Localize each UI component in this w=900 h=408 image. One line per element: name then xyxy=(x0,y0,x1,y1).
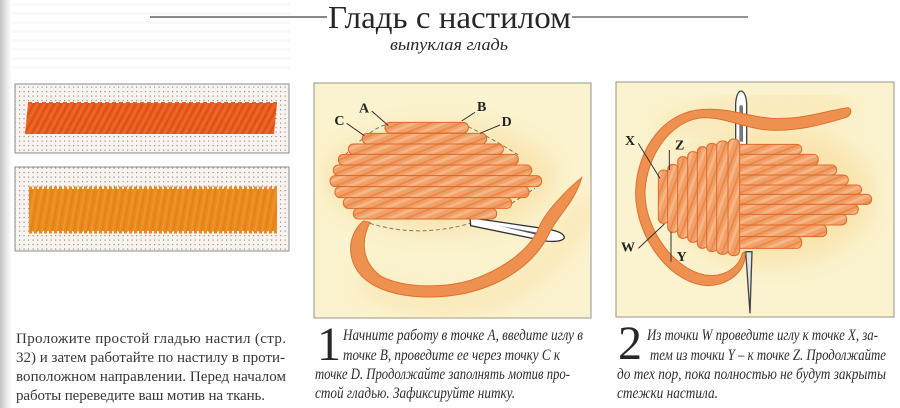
point labels: Z xyxy=(675,139,684,154)
underlay rows xyxy=(728,144,872,248)
point labels: C xyxy=(334,114,344,129)
point labels xyxy=(334,100,512,136)
title: Гладь с настилом xyxy=(328,0,571,35)
step 1 instructions: стой гладью. Зафиксируйте нитку. xyxy=(315,385,515,402)
needle xyxy=(736,91,752,313)
point labels xyxy=(621,134,687,265)
needle xyxy=(470,218,564,241)
intro text block: Проложите простой гладью настил (стр. xyxy=(16,331,286,347)
dashed outline xyxy=(345,125,535,231)
wrapping stitches xyxy=(658,139,740,256)
subtitle: выпуклая гладь xyxy=(390,35,508,54)
photo: stitched underlay swatch xyxy=(15,84,289,153)
point labels: A xyxy=(359,101,369,116)
panel: step 1 illustration xyxy=(314,83,591,318)
step 2 instructions: 2 xyxy=(618,317,642,370)
point labels: Y xyxy=(677,250,687,265)
step 1 instructions: точке В, проведите ее через точку С к xyxy=(343,347,560,364)
thread xyxy=(351,178,582,297)
satin stitch rows xyxy=(330,122,542,219)
step 1 instructions xyxy=(315,318,583,402)
panel: step 2 illustration xyxy=(616,82,894,317)
point labels: D xyxy=(502,115,512,130)
step 1 instructions: Начните работу в точке А, введите иглу в xyxy=(342,327,583,344)
photo: finished padded satin stitch swatch xyxy=(15,167,289,251)
step 1 instructions: 1 xyxy=(317,318,341,371)
step 1 instructions: точке D. Продолжайте заполнять мотив про- xyxy=(315,366,570,383)
intro text block: воположном направлении. Перед началом xyxy=(16,369,286,385)
intro text block xyxy=(16,331,286,404)
step 2 instructions: стежки настила. xyxy=(617,385,718,402)
intro text block: работы переведите ваш мотив на ткань. xyxy=(16,388,265,404)
point labels: X xyxy=(625,134,635,149)
point labels: B xyxy=(477,100,486,115)
point labels: W xyxy=(621,241,635,256)
intro text block: 32) и затем работайте по настилу в проти- xyxy=(16,350,285,366)
thread xyxy=(636,108,851,286)
step 2 instructions xyxy=(617,317,886,402)
